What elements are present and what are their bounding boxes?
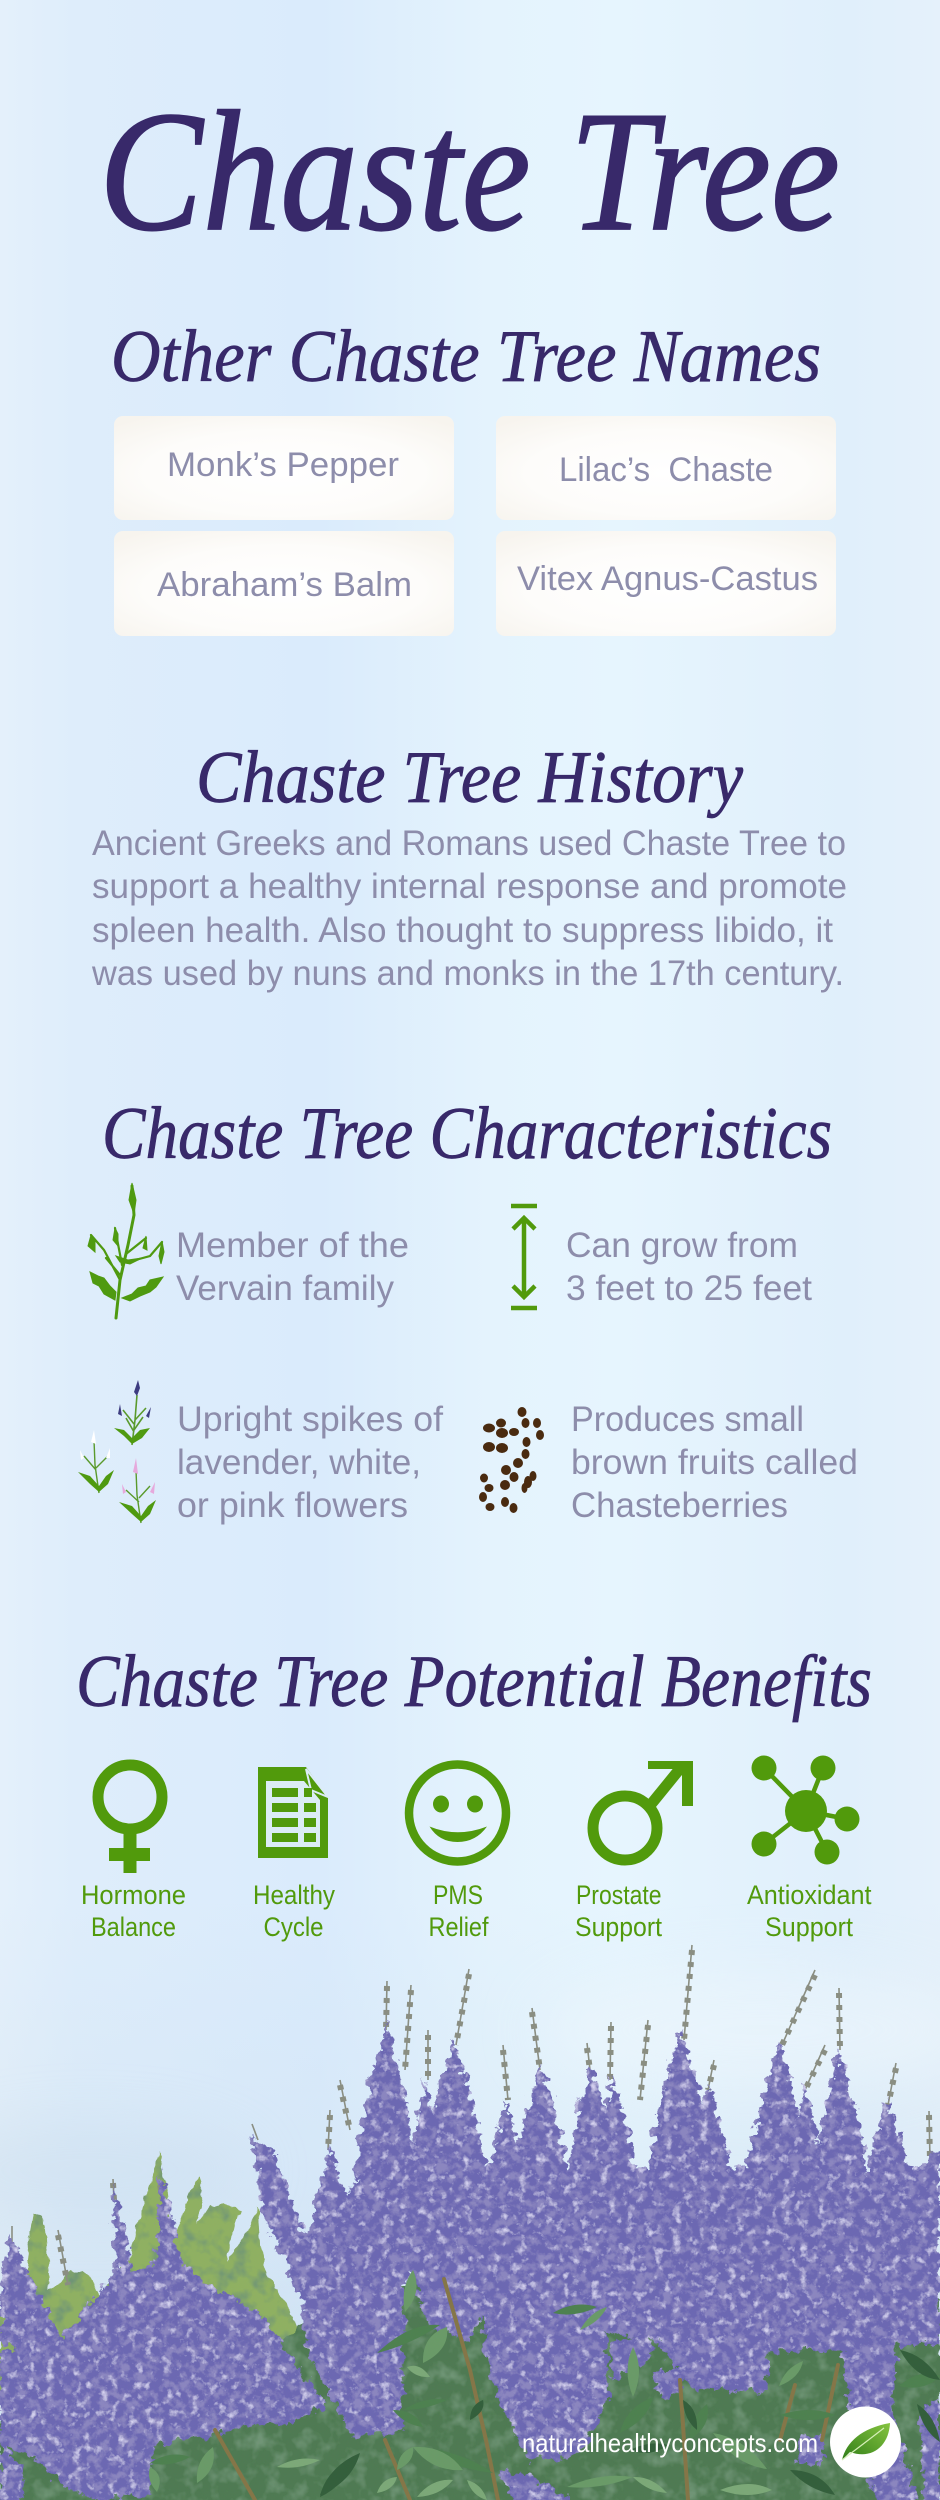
label: Prostate Support: Support bbox=[575, 1912, 662, 1942]
text: Upright spikes: or pink flowers bbox=[177, 1486, 408, 1525]
heading: other names: Other Chaste Tree Names bbox=[111, 316, 821, 398]
card: Abraham's Balm bbox=[114, 531, 454, 636]
text: Member of the Vervain family bbox=[176, 1226, 409, 1308]
icon: antioxidant molecule bbox=[752, 1756, 860, 1864]
label: Prostate Support bbox=[575, 1880, 662, 1942]
icon: brown berries bbox=[479, 1407, 544, 1513]
logo: website url: naturalhealthyconcepts.com bbox=[522, 2428, 818, 2458]
text block: history: spleen health. Also thought to suppress libido, it bbox=[92, 911, 833, 950]
icon: vervain plant bbox=[88, 1183, 164, 1318]
spikes: tapered upper flower spikes bbox=[352, 2022, 420, 2180]
icon: smiley bbox=[409, 1764, 506, 1862]
logo: leaf badge bbox=[830, 2406, 901, 2478]
stems bbox=[215, 2279, 838, 2500]
text block: history: was used by nuns and monks in the 17th century. bbox=[91, 954, 844, 993]
card: Monk's Pepper: Monk’s Pepper bbox=[167, 446, 399, 484]
left flower cluster bbox=[0, 2172, 326, 2500]
text: Member of the Vervain family: Vervain family bbox=[176, 1269, 394, 1308]
label: PMS Relief: Relief bbox=[428, 1912, 489, 1942]
text: Can grow from 3 feet to 25 feet: 3 feet to 25 feet bbox=[566, 1269, 812, 1308]
text block: history: Ancient Greeks and Romans used Chaste Tree to bbox=[92, 824, 846, 863]
text block: history: support a healthy internal response and promote bbox=[92, 867, 847, 906]
sky behind photo bbox=[0, 1900, 940, 2500]
icon: flower trio bbox=[78, 1380, 156, 1523]
card: Monk's Pepper bbox=[114, 416, 454, 520]
bud tips bbox=[12, 1945, 930, 2285]
label: Antioxidant Support bbox=[747, 1880, 872, 1942]
text: Produces small brown fruits bbox=[571, 1400, 858, 1525]
left tip spike bbox=[0, 2232, 60, 2365]
panel: benefits bbox=[81, 1756, 872, 1942]
card: Lilac's Chaste bbox=[496, 416, 836, 520]
foliage: pale green left bush bbox=[0, 2153, 310, 2400]
text: Upright spikes: lavender, white, bbox=[177, 1443, 421, 1482]
icon: height arrow bbox=[511, 1206, 537, 1308]
card: Abraham's Balm: Abraham’s Balm bbox=[157, 566, 412, 604]
label: Hormone Balance: Hormone bbox=[81, 1880, 186, 1910]
title: Chaste Tree bbox=[99, 77, 840, 267]
central flower mass bbox=[322, 2158, 940, 2415]
photo: flowering chaste tree bush bbox=[0, 1945, 940, 2500]
label: Hormone Balance: Balance bbox=[91, 1912, 176, 1942]
label: Prostate Support: Prostate bbox=[576, 1880, 662, 1910]
label: Healthy Cycle: Cycle bbox=[264, 1912, 324, 1942]
text: Can grow from 3 feet to 25 feet: Can grow from bbox=[566, 1226, 798, 1265]
text block: history bbox=[91, 824, 847, 993]
label: Healthy Cycle: Healthy bbox=[253, 1880, 335, 1910]
column left of centre bbox=[300, 2230, 405, 2436]
text: Can grow from 3 feet to 25 feet bbox=[566, 1226, 812, 1308]
label: PMS Relief: PMS bbox=[433, 1880, 483, 1910]
label: Antioxidant Support: Support bbox=[765, 1912, 853, 1942]
text: Upright spikes: Upright spikes of bbox=[177, 1400, 443, 1439]
text: Produces small brown fruits: Produces small bbox=[571, 1400, 804, 1439]
text: Upright spikes bbox=[177, 1400, 443, 1525]
text: Member of the Vervain family: Member of the bbox=[176, 1226, 409, 1265]
icon: healthy cycle table bbox=[258, 1767, 328, 1858]
card: Lilac's Chaste: Lilac’s Chaste bbox=[559, 451, 773, 489]
card: Vitex Agnus-Castus: Vitex Agnus-Castus bbox=[517, 560, 818, 598]
label: Antioxidant Support: Antioxidant bbox=[747, 1880, 872, 1910]
panel: other names cards bbox=[114, 416, 836, 636]
label: Healthy Cycle bbox=[253, 1880, 335, 1942]
card: Vitex Agnus-Castus bbox=[496, 531, 836, 636]
icon: male symbol bbox=[593, 1761, 693, 1860]
flowers: purple spikes and masses bbox=[0, 2022, 940, 2500]
icon: hormone balance bbox=[98, 1765, 162, 1873]
label: PMS Relief bbox=[428, 1880, 489, 1942]
bottom flower patches bbox=[0, 2440, 24, 2500]
panel: characteristics bbox=[78, 1183, 858, 1525]
column centre bbox=[483, 2290, 608, 2460]
leaves bbox=[149, 2270, 940, 2500]
text: Produces small brown fruits: brown fruits called bbox=[571, 1443, 858, 1482]
slanted spike bbox=[252, 2135, 360, 2345]
heading: history: Chaste Tree History bbox=[196, 737, 743, 819]
text: Produces small brown fruits: Chasteberries bbox=[571, 1486, 788, 1525]
label: Hormone Balance bbox=[81, 1880, 186, 1942]
foliage: dark green base bbox=[0, 2270, 940, 2500]
heading: characteristics: Chaste Tree Characteristics bbox=[102, 1093, 832, 1175]
